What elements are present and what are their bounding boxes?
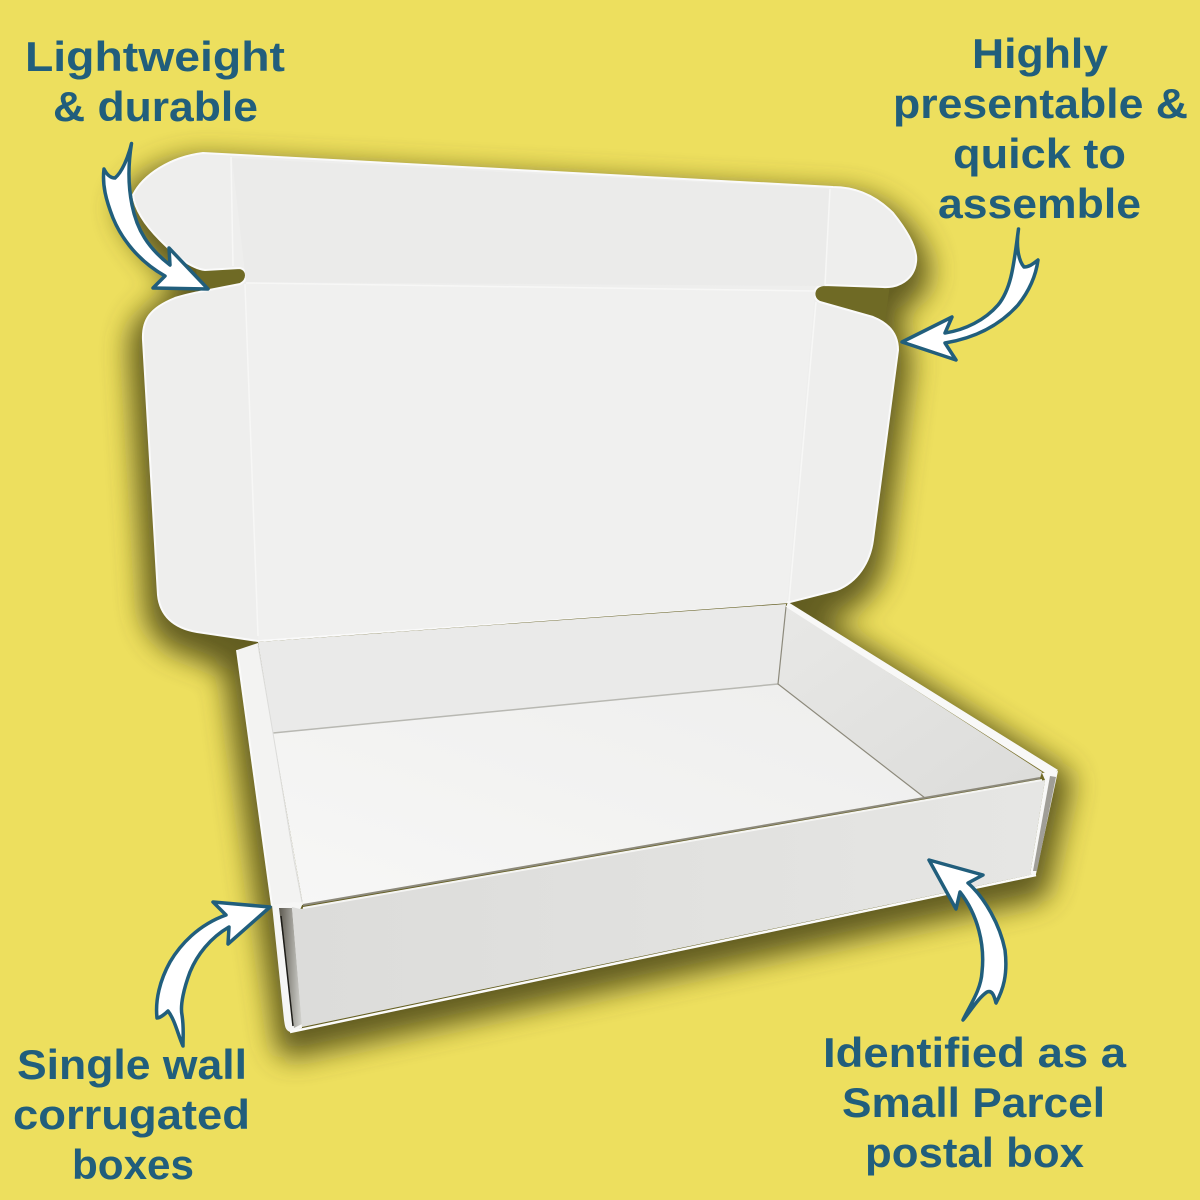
label: highly presentable [893, 30, 1188, 227]
left corner fold [272, 902, 303, 1032]
top flap panel [232, 158, 830, 286]
label: lightweight and durable: Lightweight [25, 33, 285, 80]
lid creases [231, 157, 830, 636]
box drop shadow [133, 172, 1058, 1044]
open lid [133, 153, 916, 641]
label: highly presentable: quick to [953, 130, 1126, 177]
notch shadow left [195, 264, 250, 294]
label: single wall corrugated: boxes [72, 1141, 194, 1188]
label: lightweight and durable: & durable [53, 83, 258, 130]
right corner fold [1030, 771, 1058, 875]
label: highly presentable: presentable & [893, 80, 1188, 127]
arrow: single wall corrugated [157, 902, 270, 1046]
lid main panel [246, 284, 815, 640]
arrow: highly presentable [902, 229, 1038, 360]
label: small parcel [823, 1029, 1127, 1176]
label: single wall corrugated: corrugated [13, 1091, 250, 1138]
front rim highlight [303, 780, 1042, 908]
label: small parcel: Small Parcel [842, 1079, 1105, 1126]
left wall rim [237, 650, 272, 906]
front bottom edge [290, 875, 1036, 1032]
floor [273, 684, 925, 905]
back wall crease [273, 684, 778, 733]
right wall [778, 606, 1042, 798]
label: highly presentable: Highly [972, 30, 1109, 77]
right wall creases [778, 607, 925, 798]
label: single wall corrugated [13, 1041, 250, 1188]
back wall [258, 604, 786, 733]
box tray [237, 602, 1058, 1032]
label: small parcel: Identified as a [823, 1029, 1127, 1076]
right wall rim [786, 602, 1058, 776]
arrow: small parcel [929, 860, 1006, 1020]
lid outer shape [133, 153, 916, 641]
label: single wall corrugated: Single wall [17, 1041, 247, 1088]
label: highly presentable: assemble [938, 180, 1141, 227]
left wall [237, 643, 303, 906]
front wall [292, 780, 1045, 1027]
notch shadow right [812, 282, 890, 322]
cardboard box [133, 153, 1058, 1032]
arrow: lightweight and durable [103, 144, 208, 289]
front wall top edge [303, 778, 1040, 905]
left wall inner crease [258, 645, 302, 902]
label: small parcel: postal box [865, 1129, 1085, 1176]
label: lightweight and durable [25, 33, 285, 130]
